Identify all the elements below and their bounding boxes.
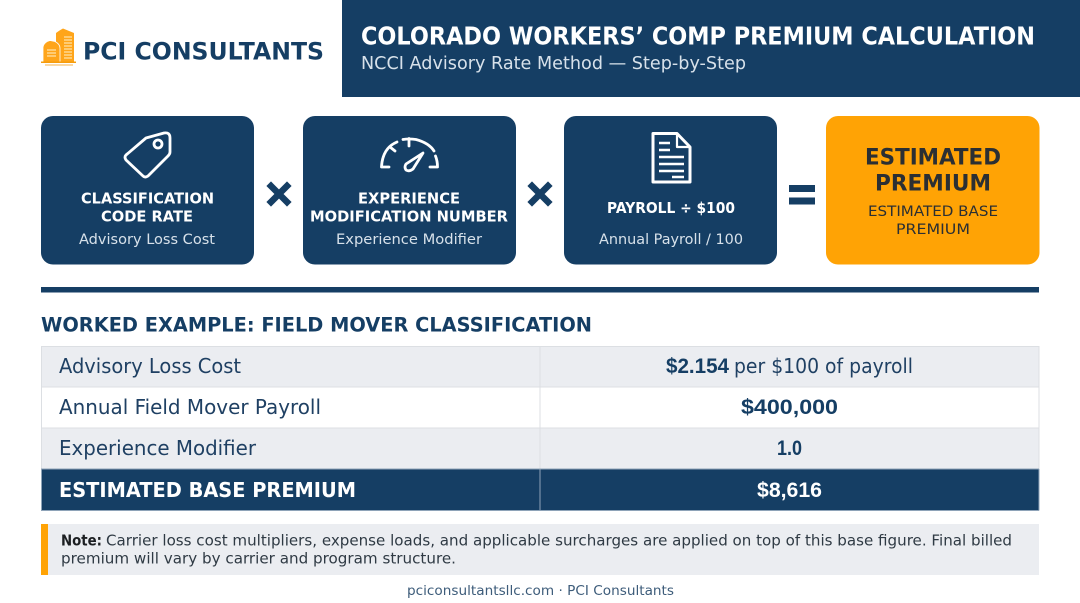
result subtitle — [868, 204, 998, 238]
row: advisory loss cost: Advisory Loss Cost — [59, 354, 241, 378]
subtitle: NCCI Advisory Rate Method — Step-by-Step — [361, 54, 746, 74]
row: annual field mover payroll: Annual Field Mover Payroll — [59, 395, 321, 419]
card heading: MODIFICATION NUMBER — [310, 208, 508, 226]
operator: multiply — [271, 186, 287, 202]
logo wordmark: PCI CONSULTANTS — [83, 38, 324, 66]
card heading: CODE RATE — [101, 208, 193, 226]
note text: premium will vary by carrier and program structure. — [61, 550, 456, 568]
card heading: EXPERIENCE — [358, 190, 460, 208]
row: estimated base premium — [41, 469, 1039, 510]
header banner — [342, 0, 1080, 97]
row: experience modifier — [41, 428, 1039, 469]
icon: document — [653, 134, 690, 182]
row: advisory loss cost: $2.154 — [666, 355, 729, 378]
row: annual field mover payroll: $400,000 — [741, 396, 838, 419]
icon: price tag — [125, 133, 170, 177]
heading: worked example: WORKED EXAMPLE: FIELD MOVER CLASSIFICATION — [41, 314, 592, 336]
icon: orange buildings — [41, 28, 76, 66]
panel: estimated premium — [826, 116, 1040, 264]
card subtitle: Advisory Loss Cost — [79, 232, 215, 248]
row: estimated base premium: $8,616 — [757, 479, 822, 502]
row: experience modifier: Experience Modifier — [59, 436, 257, 460]
operator: multiply — [532, 186, 548, 202]
panel: classification code rate — [41, 116, 254, 264]
note text: Carrier loss cost multipliers, expense loads, and applicable surcharges are applied on top of this base figure. Final billed — [106, 532, 1012, 550]
card heading — [310, 190, 508, 226]
card heading: CLASSIFICATION — [81, 190, 214, 208]
card subtitle: Experience Modifier — [336, 232, 482, 248]
row: annual field mover payroll — [41, 387, 1039, 428]
result subtitle: ESTIMATED BASE — [868, 204, 998, 220]
card heading — [81, 190, 214, 226]
result heading: ESTIMATED — [865, 144, 1001, 170]
note text — [61, 532, 1012, 568]
row: experience modifier: 1.0 — [777, 437, 802, 460]
result heading: PREMIUM — [875, 170, 991, 196]
logo: PCI Consultants — [41, 28, 324, 66]
title: COLORADO WORKERS’ COMP PREMIUM CALCULATION — [361, 22, 1035, 50]
icon: gauge — [382, 138, 438, 171]
panel: payroll divided by 100 — [564, 116, 777, 264]
result heading — [865, 144, 1001, 196]
row: advisory loss cost — [41, 346, 1039, 387]
row: estimated base premium: ESTIMATED BASE PREMIUM — [59, 478, 356, 502]
row: advisory loss cost: per $100 of payroll — [734, 354, 913, 378]
table: worked example values — [41, 346, 1039, 510]
operator: equals — [789, 185, 815, 204]
result subtitle: PREMIUM — [896, 222, 970, 238]
card subtitle: Annual Payroll / 100 — [599, 232, 743, 248]
panel: experience modification number — [303, 116, 516, 264]
footer: pciconsultantsllc.com · PCI Consultants — [407, 583, 674, 599]
note text: Note: — [61, 532, 102, 550]
card heading: PAYROLL ÷ $100 — [607, 199, 735, 217]
callout: note — [41, 524, 1039, 575]
